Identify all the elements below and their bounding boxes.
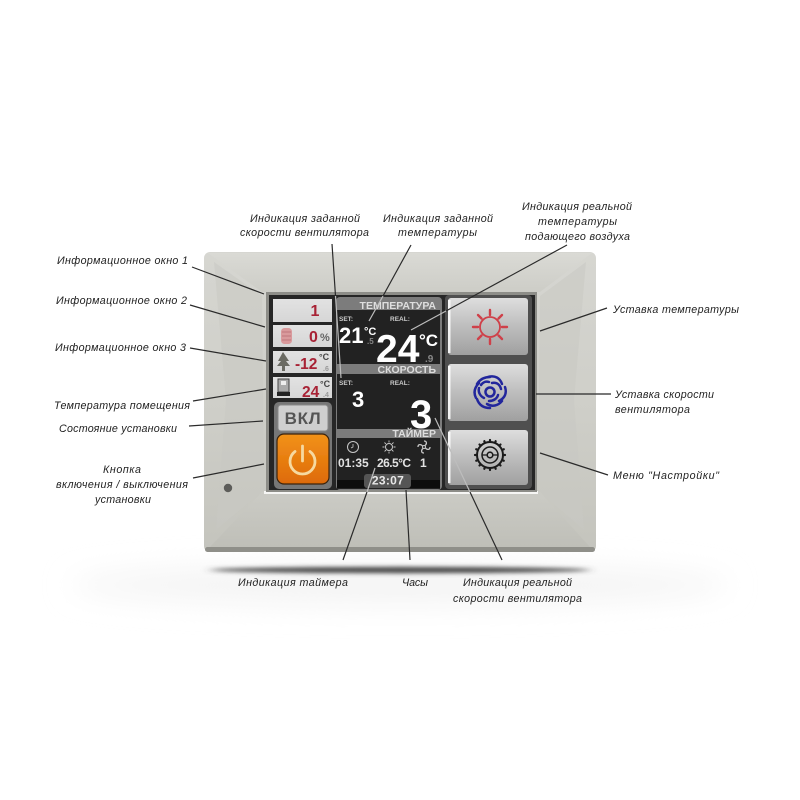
speed real value: 3 bbox=[410, 393, 432, 437]
leader lines bbox=[189, 244, 611, 560]
room temperature window: 24 bbox=[302, 384, 320, 401]
top captions: подающего воздуха bbox=[525, 231, 630, 243]
temperature heading: ТЕМПЕРАТУРА bbox=[360, 300, 436, 312]
information window 3: -12 bbox=[295, 356, 317, 373]
left captions: включения / выключения bbox=[56, 479, 188, 491]
bottom captions bbox=[238, 577, 582, 605]
left captions bbox=[54, 255, 190, 506]
clock bbox=[337, 474, 440, 488]
top captions: скорости вентилятора bbox=[240, 227, 369, 239]
information window 2 bbox=[273, 325, 332, 347]
touch screen bbox=[54, 201, 739, 605]
information window 1: 1 bbox=[311, 303, 320, 320]
right captions: Меню "Настройки" bbox=[613, 470, 720, 482]
left captions: установки bbox=[94, 494, 151, 506]
temperature real value: .9 bbox=[425, 354, 434, 365]
bottom captions: Часы bbox=[402, 577, 428, 589]
speed set value: 3 bbox=[352, 387, 364, 412]
top captions: Индикация заданной bbox=[383, 213, 493, 225]
temperature set value: 21 bbox=[339, 323, 363, 348]
speed heading: СКОРОСТЬ bbox=[378, 364, 436, 376]
room temperature window bbox=[273, 377, 332, 401]
timer values bbox=[338, 456, 427, 470]
information window 2: % bbox=[320, 332, 330, 344]
top captions: Индикация реальной bbox=[522, 201, 632, 213]
top captions: температуры bbox=[538, 216, 617, 228]
bottom captions: Индикация таймера bbox=[238, 577, 348, 589]
temperature real value: °C bbox=[419, 331, 438, 350]
temperature set value: °C bbox=[364, 326, 376, 338]
ВКЛ status and power button frame bbox=[274, 402, 332, 489]
button: temperature setpoint bbox=[448, 298, 528, 355]
information window 3: °C bbox=[319, 352, 330, 362]
bottom captions: Индикация реальной bbox=[463, 577, 572, 589]
button: settings menu bbox=[448, 430, 528, 485]
left captions: Температура помещения bbox=[54, 400, 190, 412]
status label: ВКЛ bbox=[285, 409, 321, 428]
speed real value bbox=[390, 380, 432, 437]
right captions: Уставка скорости bbox=[614, 389, 714, 401]
information window 2: 0 bbox=[309, 329, 318, 346]
clock: 23:07 bbox=[372, 474, 404, 488]
temperature set value: SET: bbox=[339, 316, 353, 323]
left captions: Состояние установки bbox=[59, 423, 177, 435]
timer heading: ТАЙМЕР bbox=[392, 427, 436, 440]
left captions: Кнопка bbox=[103, 464, 141, 476]
timer values: 26.5°C bbox=[377, 456, 411, 470]
temperature real value: REAL: bbox=[390, 316, 410, 323]
status label bbox=[278, 405, 328, 431]
right captions: вентилятора bbox=[615, 404, 690, 416]
status LED bbox=[224, 484, 232, 492]
floor shadow bbox=[70, 565, 730, 605]
room temperature window: °C bbox=[320, 379, 331, 389]
top captions: температуры bbox=[398, 227, 477, 239]
left captions: Информационное окно 3 bbox=[55, 342, 186, 354]
timer icons bbox=[348, 440, 430, 454]
timer values: 1 bbox=[420, 456, 427, 470]
device panel bbox=[204, 252, 596, 552]
information window 3 bbox=[273, 351, 332, 373]
top captions bbox=[240, 201, 632, 243]
timer values: 01:35 bbox=[338, 456, 369, 470]
top captions: Индикация заданной bbox=[250, 213, 360, 225]
temperature set value bbox=[339, 316, 376, 348]
information window 1 bbox=[273, 299, 332, 322]
power button bbox=[277, 434, 329, 484]
bottom captions: скорости вентилятора bbox=[453, 593, 582, 605]
temperature set value: .5 bbox=[367, 337, 374, 346]
room temperature window: .4 bbox=[323, 392, 329, 399]
temperature real value bbox=[376, 316, 438, 371]
button: fan speed setpoint bbox=[448, 364, 528, 421]
central display bbox=[336, 297, 442, 490]
button frame bbox=[445, 295, 532, 489]
speed set value: SET: bbox=[339, 380, 353, 387]
left captions: Информационное окно 2 bbox=[56, 295, 187, 307]
right captions: Уставка температуры bbox=[612, 304, 739, 316]
information window 3: .6 bbox=[323, 366, 329, 373]
left captions: Информационное окно 1 bbox=[57, 255, 188, 267]
right captions bbox=[612, 304, 739, 482]
speed real value: REAL: bbox=[390, 380, 410, 387]
speed set value bbox=[339, 380, 364, 412]
temperature real value: 24 bbox=[376, 328, 420, 371]
